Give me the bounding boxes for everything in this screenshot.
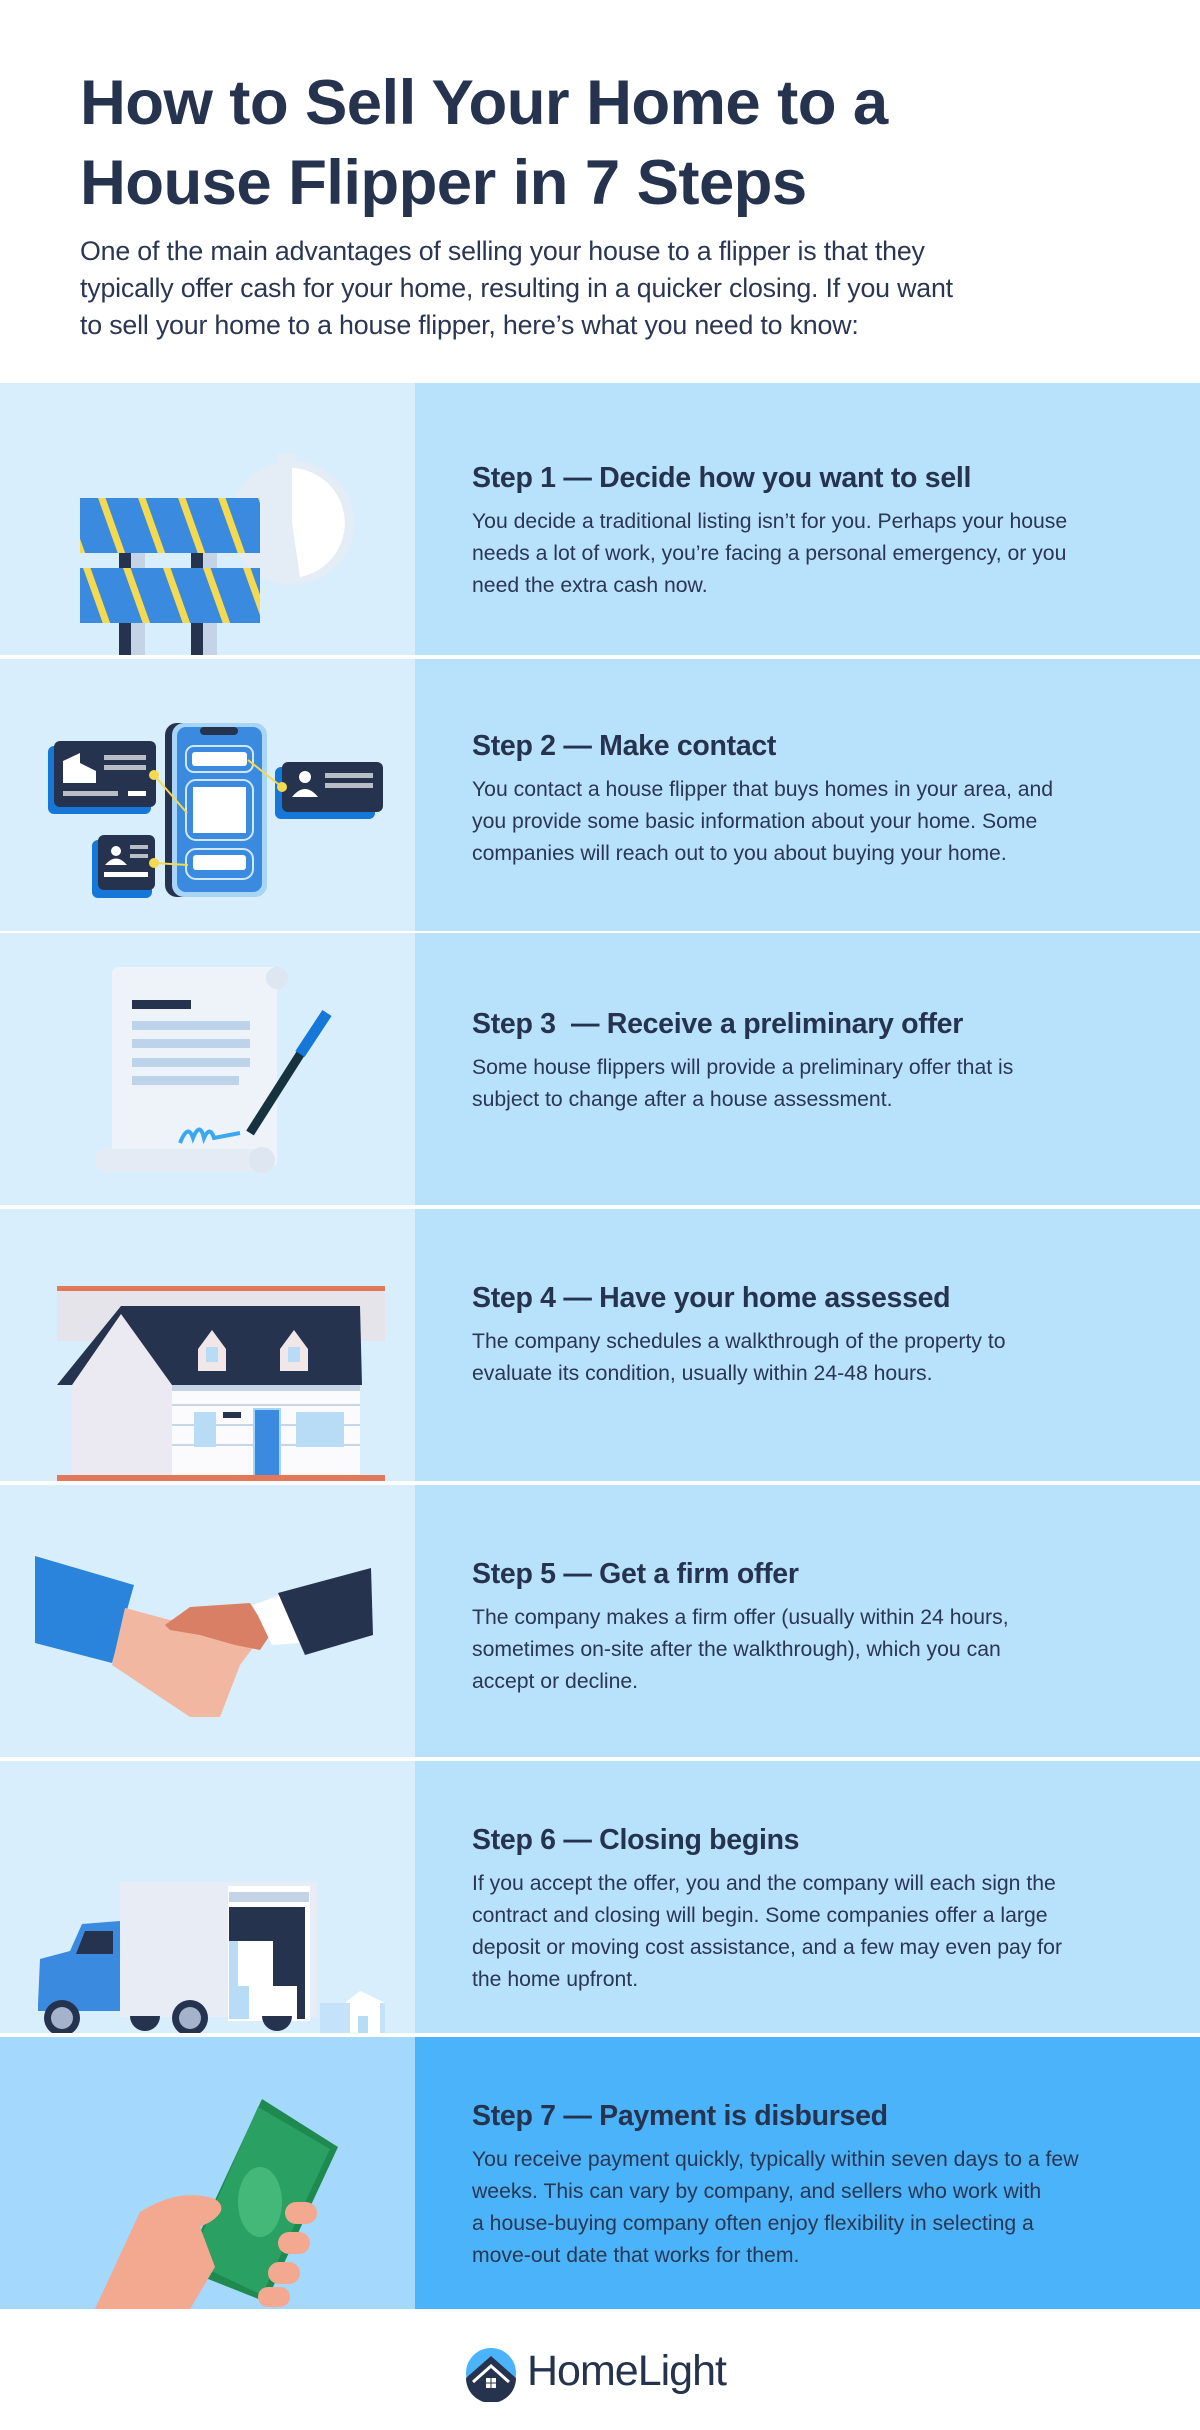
icon: house — [57, 1286, 385, 1481]
text: step 3: Some house flippers will provide a preliminary offer that is — [472, 1056, 1013, 1079]
panel: step 1 — [0, 383, 1200, 655]
panel: step 4 — [0, 1209, 1200, 1481]
title: How to Sell Your Home to a — [80, 68, 888, 138]
text: step 5: accept or decline. — [472, 1670, 638, 1693]
icon: handshake — [35, 1556, 373, 1717]
panel: step 7 — [0, 2037, 1200, 2309]
text: step 4: Step 4 — Have your home assessed — [472, 1282, 950, 1314]
logo: HomeLight — [466, 2347, 727, 2402]
text: step 6: contract and closing will begin. Some companies offer a large — [472, 1904, 1048, 1927]
text: step 7: move-out date that works for them. — [472, 2244, 799, 2267]
panel: step 2 — [0, 659, 1200, 931]
text: step 5: sometimes on-site after the walkthrough), which you can — [472, 1638, 1001, 1661]
text: step 3: Step 3 — Receive a preliminary offer — [472, 1008, 963, 1040]
text: step 1: Step 1 — Decide how you want to sell — [472, 462, 971, 494]
text: step 2: You contact a house flipper that buys homes in your area, and — [472, 778, 1053, 801]
text: step 3: subject to change after a house assessment. — [472, 1088, 892, 1111]
panel: step 3 — [0, 933, 1200, 1205]
text: step 2: Step 2 — Make contact — [472, 730, 776, 762]
text: step 6: deposit or moving cost assistance, and a few may even pay for — [472, 1936, 1062, 1959]
intro text: One of the main advantages of selling your house to a flipper is that they — [80, 236, 925, 266]
text: step 2: companies will reach out to you about buying your home. — [472, 842, 1007, 865]
intro text: to sell your home to a house flipper, here’s what you need to know: — [80, 310, 859, 340]
text: step 6: If you accept the offer, you and the company will each sign the — [472, 1872, 1056, 1895]
title — [80, 68, 889, 218]
text: step 4 — [472, 1282, 1006, 1385]
text: step 6 — [472, 1824, 1062, 1991]
text: step 4: The company schedules a walkthrough of the property to — [472, 1330, 1006, 1353]
text: step 5 — [472, 1558, 1009, 1693]
panel: step 5 — [0, 1485, 1200, 1757]
logo: HomeLight: HomeLight — [527, 2347, 726, 2395]
intro text — [80, 236, 953, 340]
intro text: typically offer cash for your home, resulting in a quicker closing. If you want — [80, 273, 953, 303]
text: step 5: The company makes a firm offer (usually within 24 hours, — [472, 1606, 1009, 1629]
text: step 1 — [472, 462, 1067, 597]
icon: phone with contact cards — [48, 723, 383, 898]
text: step 7: Step 7 — Payment is disbursed — [472, 2100, 888, 2132]
text: step 7: weeks. This can vary by company, and sellers who work with — [472, 2180, 1041, 2203]
icon: logo mark — [466, 2348, 516, 2402]
icon: barrier and stopwatch — [80, 453, 354, 655]
text: step 4: evaluate its condition, usually within 24-48 hours. — [472, 1362, 933, 1385]
panel: step 6 — [0, 1761, 1200, 2033]
text: step 5: Step 5 — Get a firm offer — [472, 1558, 799, 1590]
text: step 7 — [472, 2100, 1079, 2267]
icon: contract and pen — [95, 967, 332, 1173]
text: step 7: You receive payment quickly, typically within seven days to a few — [472, 2148, 1079, 2171]
text: step 6: the home upfront. — [472, 1968, 638, 1991]
icon: hand holding cash — [95, 2099, 338, 2309]
text: step 1: need the extra cash now. — [472, 574, 708, 597]
icon: moving truck — [38, 1882, 385, 2033]
text: step 1: You decide a traditional listing isn’t for you. Perhaps your house — [472, 510, 1067, 533]
text: step 2 — [472, 730, 1053, 865]
title: House Flipper in 7 Steps — [80, 148, 807, 218]
text: step 3 — [472, 1008, 1013, 1111]
text: step 6: Step 6 — Closing begins — [472, 1824, 799, 1856]
text: step 2: you provide some basic information about your home. Some — [472, 810, 1037, 833]
text: step 7: a house-buying company often enjoy flexibility in selecting a — [472, 2212, 1034, 2235]
text: step 1: needs a lot of work, you’re facing a personal emergency, or you — [472, 542, 1066, 565]
